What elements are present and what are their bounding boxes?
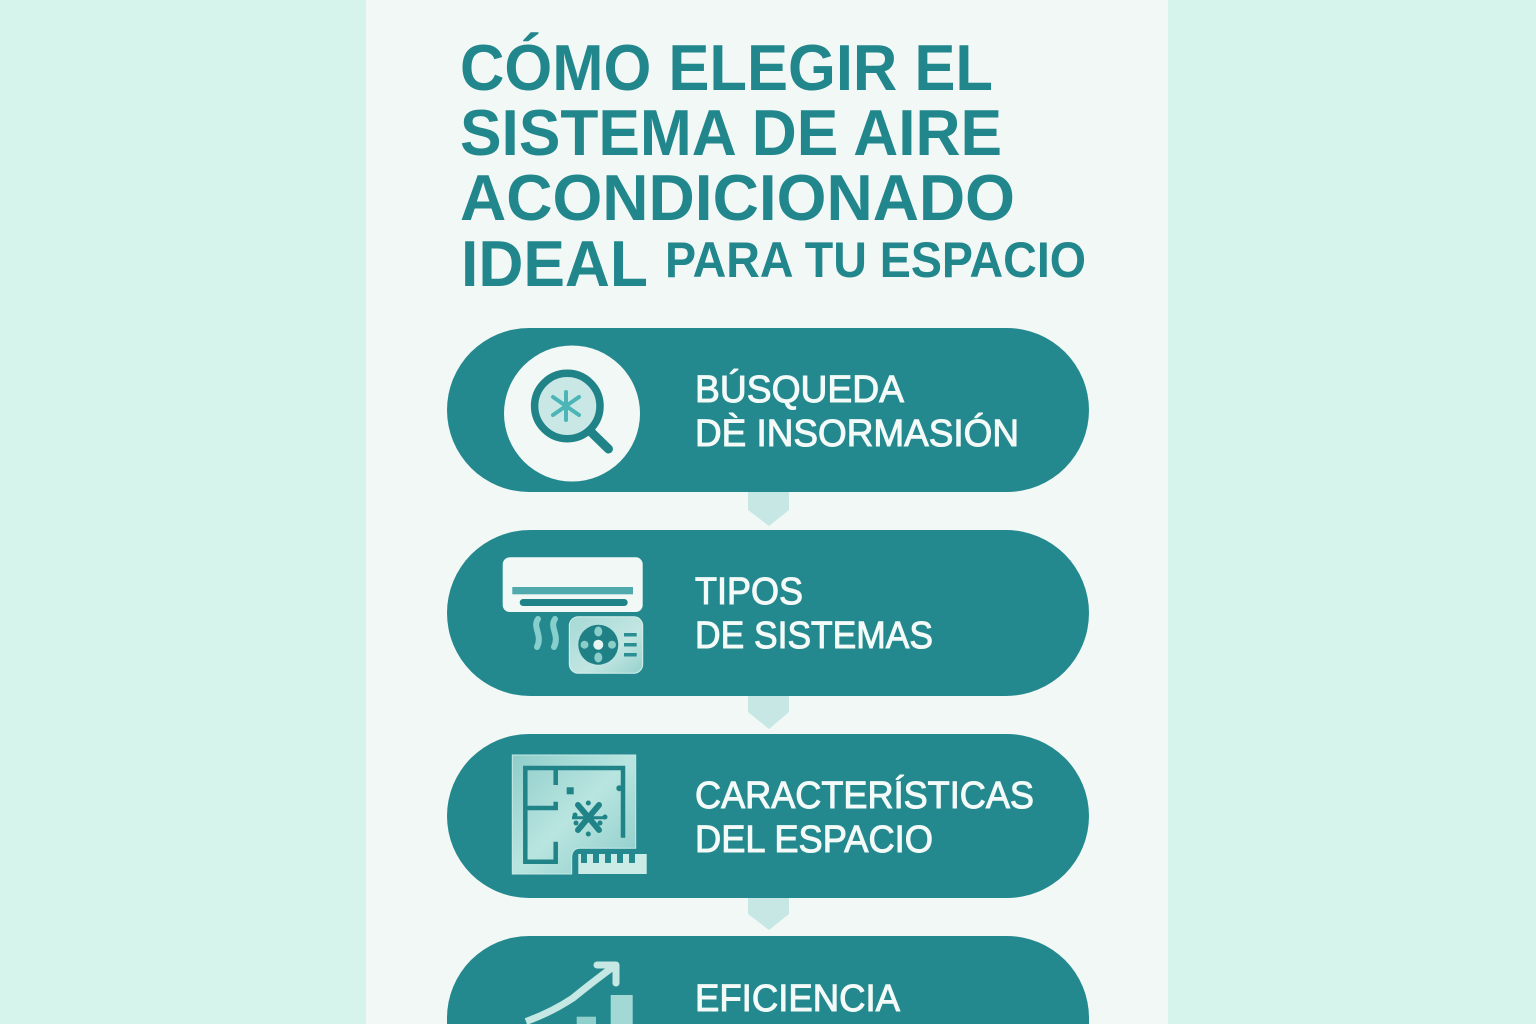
title: CÓMO ELEGIR EL — [460, 31, 993, 104]
icon: ruler — [578, 854, 647, 874]
panel: búsqueda de información — [447, 328, 1089, 492]
title: PARA TU ESPACIO — [665, 232, 1086, 288]
icon: rising chart — [526, 965, 633, 1024]
label: CARACTERÍSTICAS — [695, 774, 1034, 817]
label: BÚSQUEDA — [695, 368, 905, 411]
label — [695, 368, 1019, 455]
label: EFICIENCIA — [695, 978, 901, 1020]
icon: magnifying glass — [504, 346, 640, 482]
panel: eficiencia — [447, 936, 1089, 1024]
label — [695, 571, 933, 657]
title — [460, 31, 1086, 300]
label: TIPOS — [695, 571, 803, 613]
arrow: step 2 to 3 — [748, 696, 789, 729]
label: DÈ INSORMASIÓN — [695, 412, 1019, 455]
title: ACONDICIONADO — [460, 161, 1015, 234]
panel: características del espacio — [447, 734, 1089, 898]
icon: air conditioner — [503, 557, 643, 673]
label — [695, 774, 1034, 861]
title: SISTEMA DE AIRE — [460, 96, 1002, 169]
title: IDEAL — [461, 227, 648, 300]
icon: floor plan — [512, 755, 647, 874]
central panel — [366, 0, 1168, 1024]
label: DE SISTEMAS — [695, 615, 933, 657]
arrow: step 1 to 2 — [748, 492, 789, 526]
panel: tipos de sistemas — [447, 530, 1089, 696]
arrow: step 3 to 4 — [748, 898, 789, 930]
label: DEL ESPACIO — [695, 819, 933, 861]
